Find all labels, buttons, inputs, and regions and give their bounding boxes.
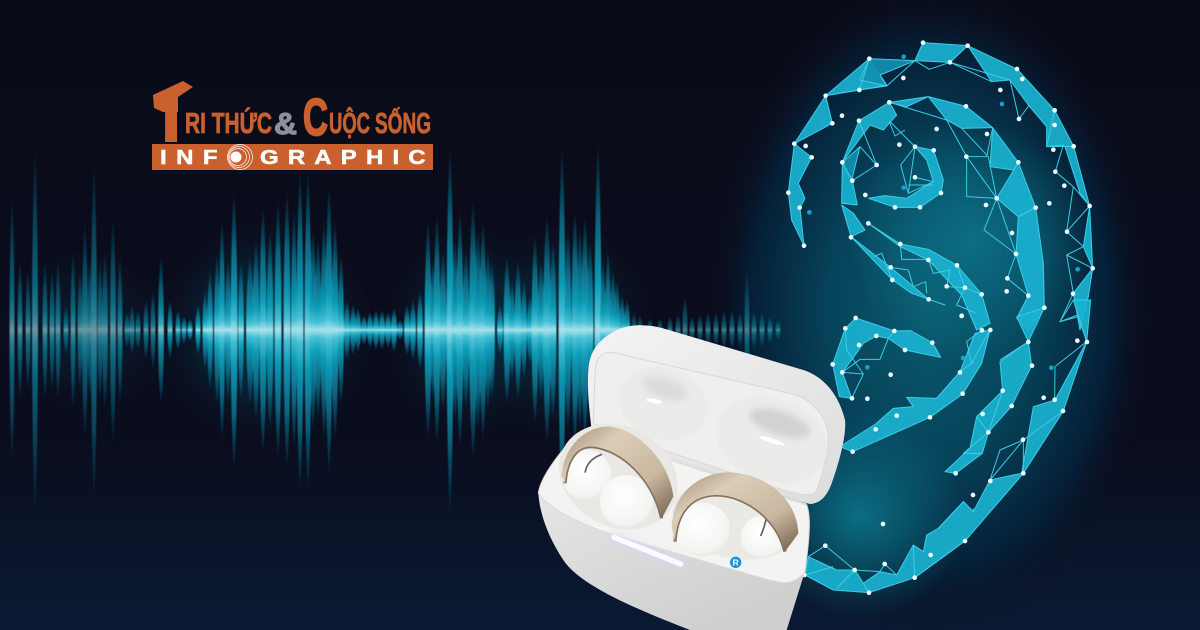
logo title text: & [274, 106, 297, 141]
case base [538, 430, 810, 630]
ear upper mesh [786, 41, 1095, 330]
blue R badge [730, 557, 741, 568]
infographic banner: GRAPHIC [260, 146, 426, 169]
blue R badge: R [733, 558, 740, 568]
ear polygon mesh [786, 41, 1095, 595]
case lid [588, 325, 845, 504]
logo title text [185, 89, 431, 147]
infographic banner [152, 144, 433, 170]
teal glow behind ear [600, 0, 1200, 630]
logo title text: C [303, 89, 328, 147]
ear lower mesh [802, 300, 1091, 595]
logo mark: stylised T [153, 81, 193, 142]
logo [152, 81, 433, 170]
icon: sound target [228, 144, 252, 170]
gold ring left [562, 427, 673, 518]
earbud cups and buds [540, 404, 805, 571]
logo title text: SỐNG [375, 106, 431, 140]
white charging case with ring earbuds [538, 325, 845, 630]
logo title text: RI THỨC [185, 106, 272, 140]
infographic banner: INF [160, 146, 218, 169]
sound waveform [10, 140, 780, 520]
LED light strip [614, 537, 681, 564]
lid pockets [609, 355, 838, 497]
logo title text: UỘC [329, 106, 370, 140]
gold ring right [672, 472, 798, 552]
logo mark: stylised T: T [152, 86, 190, 155]
